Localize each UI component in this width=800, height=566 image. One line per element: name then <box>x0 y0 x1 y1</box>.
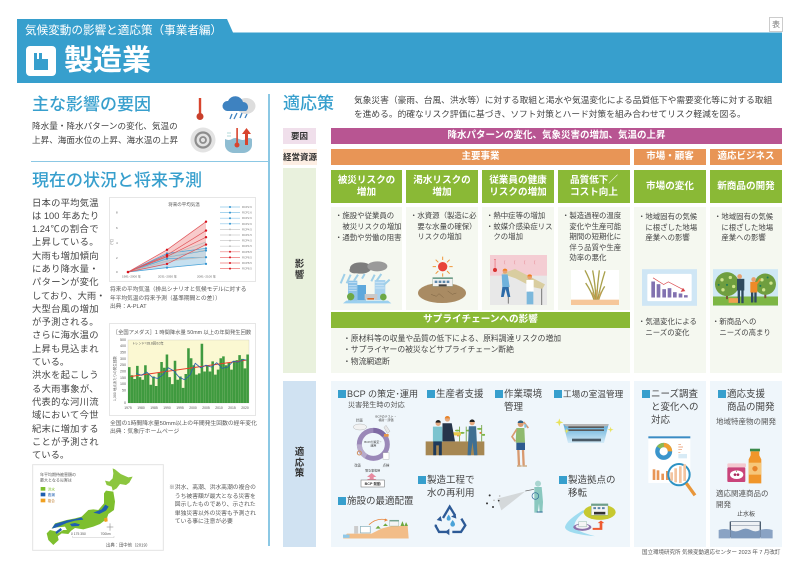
list: ・製造過程の温度 変化や生産可能 期間の短期化に 伴う品質や生産 効率の悪化 <box>562 211 621 262</box>
bar chart: heavy rain frequency: 500 <box>120 338 126 342</box>
illustration: drought factory <box>418 256 466 303</box>
row label: management resources <box>281 149 319 165</box>
subtext: local products: 地域特産物の開発 <box>716 417 776 426</box>
heading: 施設の最適配置 <box>347 496 414 507</box>
text: current status and projection: にあり降水量・ <box>32 264 98 274</box>
text: current status and projection: ことが予測され <box>32 437 98 447</box>
heading: BCP の策定･運用 <box>347 389 418 399</box>
subtext: related products <box>716 489 768 508</box>
line chart: average temperature: 2031–2050 年 <box>158 274 177 278</box>
item: BCP <box>338 389 418 409</box>
bar chart: heavy rain frequency: ［全国アメダス］1 時間降水量 50mm 以上の年間発生回数 <box>113 328 252 336</box>
divider <box>31 161 268 162</box>
list: demand: ・新商品への ニーズの高まり <box>712 317 771 337</box>
heading: 適応支援 商品の開発 <box>727 389 775 413</box>
bar chart: heavy rain frequency: 0 <box>124 401 126 405</box>
bar chart: heavy rain frequency: 150 <box>120 376 126 380</box>
illustration: hot factory workers <box>490 255 547 305</box>
panel: disaster risk <box>331 207 402 310</box>
footer credit: 国立環境研究所 気候変動適応センター 2023 年 7 月改訂 <box>642 550 780 556</box>
item: work environment <box>495 388 542 413</box>
text: current status and projection: 大型台風の増加 <box>32 304 98 314</box>
illustration: jam and juice <box>727 448 762 484</box>
line chart: average temperature: 0 <box>116 270 118 274</box>
text: main factors <box>32 121 178 144</box>
heading: 作業環境 管理 <box>504 389 542 413</box>
illustration: data analysis <box>648 436 696 496</box>
list: ・サプライヤーの被災などサプライチェーン断絶 <box>343 345 514 354</box>
line chart: average temperature: RCP8.5 <box>242 267 252 271</box>
icon: thermometer <box>196 98 204 120</box>
bar chart: heavy rain frequency: 50 <box>122 388 126 392</box>
diagram: BCP cycle <box>353 413 397 488</box>
icon: factory <box>26 46 56 76</box>
bar chart: heavy rain frequency: 1980 <box>137 406 145 410</box>
diagram: BCP cycle: 計画 <box>356 417 363 422</box>
caption: temperature chart: 将来の平均気温（排出シナリオと気候モデルに対する 年平均気温の将来予測（基準期間との差）） 出典：A-PLAT <box>110 287 246 310</box>
impact header: employee health: リスクの増加 <box>489 186 547 198</box>
line chart: average temperature: RCP8.5 <box>242 250 252 254</box>
panel: new products <box>710 207 782 373</box>
bar chart: heavy rain frequency: 2010 <box>215 406 223 410</box>
resource bar: main business: 主要事業 <box>461 151 500 162</box>
diagram: BCP cycle: BCPの策定・ <box>364 439 382 444</box>
text: current status and projection: 紀末に増加する <box>32 424 98 434</box>
text: current status and projection: 1.24℃の割合で <box>32 224 98 234</box>
impact header: disaster risk <box>331 170 402 203</box>
header banner <box>17 19 782 83</box>
bar chart: heavy rain frequency: 400 <box>120 344 126 348</box>
text: current status and projection: しており、大雨・ <box>32 291 105 301</box>
panel: supply chain <box>331 312 630 373</box>
text: current status and projection: は 100 年あたり <box>32 211 99 221</box>
line chart: average temperature: 8 <box>116 210 118 214</box>
bar chart: heavy rain frequency: 350 <box>120 350 126 354</box>
diagram: BCP cycle: 改善 <box>354 462 362 467</box>
impact header: disaster risk: 被災リスクの <box>338 174 395 186</box>
impact header: new products: 新商品の開発 <box>717 180 775 192</box>
bar chart: heavy rain frequency: 2015 <box>228 406 236 410</box>
bar chart: heavy rain frequency: 100 <box>120 382 126 386</box>
diagram: BCP cycle: BCPのテスト・ <box>375 413 397 418</box>
subtext: 災害発生時の対応 <box>348 401 405 409</box>
text: current status and projection: が予測される。 <box>32 317 98 327</box>
item: water reuse <box>418 474 475 499</box>
factor bar <box>331 128 782 144</box>
impact header: quality and cost <box>558 170 630 203</box>
text: current status and projection: ている。 <box>32 357 69 367</box>
list: ・施設や従業員の 被災リスクの増加 ・通勤や労働の阻害 <box>335 211 402 242</box>
marker <box>642 390 650 398</box>
line chart: average temperature: RCP4.5 <box>242 233 252 237</box>
text: current status and projection: さらに海水温の <box>32 330 98 340</box>
illustration: relocation to hill <box>343 518 409 538</box>
diagram: BCP cycle: 検討・評価 <box>378 417 394 422</box>
icon: typhoon <box>190 128 216 152</box>
illustration: air conditioner <box>556 418 614 443</box>
row label: adaptation: 応 <box>295 458 304 469</box>
map: largest disaster type in Japan: 年平均期待被害額の <box>40 471 76 477</box>
line chart: average temperature: RCP2.6 <box>242 211 252 215</box>
map: largest disaster type in Japan: 0 175 350 <box>71 532 86 536</box>
factor bar: 降水パターンの変化、気象災害の増加、気温の上昇 <box>447 130 666 141</box>
bar chart: heavy rain frequency: 2005 <box>202 406 210 410</box>
text: current status and projection: ている。 <box>32 450 69 460</box>
banner background shape <box>17 19 782 83</box>
bar chart: heavy rain frequency: 1995 <box>176 406 184 410</box>
illustration: flooded city <box>340 261 392 304</box>
panel: market adaptation <box>634 381 706 547</box>
row label: adaptation <box>283 381 316 547</box>
impact header: quality and cost: 品質低下／ <box>570 174 618 186</box>
item: factory room temperature <box>554 389 623 399</box>
line chart: average temperature: 4 <box>116 241 118 245</box>
text: current status and projection: 洪水を起こしう <box>32 370 98 380</box>
text: main factors: 上昇、海面水位の上昇、海水温の上昇 <box>32 134 178 144</box>
map: largest disaster type in Japan: 出典：田中他（2019） <box>106 541 150 548</box>
row label: factors: 要因 <box>291 131 308 141</box>
panel: market change <box>634 207 706 373</box>
map: largest disaster type in Japan: 高潮 <box>48 492 55 497</box>
bar chart: heavy rain frequency: 2000 <box>189 406 197 410</box>
text: main factors: 降水量・降水パターンの変化、気温の <box>32 121 178 131</box>
panel: main business adaptation <box>331 381 630 547</box>
line chart: average temperature: 6 <box>116 226 118 230</box>
line chart: average temperature: RCP4.5 <box>242 227 252 231</box>
icon: sea level and temperature rise <box>225 128 252 153</box>
sheet tag: 表 <box>772 20 780 29</box>
bar chart: heavy rain frequency: 300 <box>120 357 126 361</box>
map: largest disaster type in Japan <box>32 464 164 551</box>
heading: ニーズ調査 と変化への 対応 <box>651 389 699 426</box>
text: current status and projection: 域において今世 <box>32 410 98 420</box>
list: ・原材料等の収量や品質の低下による、原料調達リスクの増加 <box>343 334 561 342</box>
resource bar: adaptation business: 適応ビジネス <box>717 151 774 162</box>
item: relocation <box>559 474 616 499</box>
impact header: water shortage <box>406 170 478 203</box>
impact header: water shortage: 渇水リスクの <box>413 174 471 186</box>
bar chart: heavy rain frequency: トレンド=28.8回/10年 <box>132 340 164 346</box>
map: largest disaster type in Japan: 複合 <box>48 498 55 503</box>
line chart: average temperature: 2081–2100 年 <box>197 274 216 278</box>
line chart: average temperature: 将来の平均気温 <box>168 201 200 208</box>
text: current status and projection: パターンが変化 <box>32 277 98 287</box>
resource bar: main business <box>331 149 630 165</box>
text: adaptation intro <box>354 94 772 118</box>
resource bar: market and customers <box>634 149 706 165</box>
text: current status and projection: 日本の平均気温 <box>32 198 98 208</box>
illustration: declining bar chart <box>642 269 697 306</box>
marker <box>427 390 435 398</box>
item: producer support <box>427 388 484 400</box>
text: current status and projection: 上昇も見込まれ <box>32 344 98 354</box>
icon: water recycling <box>434 504 467 536</box>
diagram: BCP cycle: 緊急事態時 <box>365 467 380 472</box>
diagram: BCP cycle: 点検 <box>383 462 390 467</box>
illustration: base relocation <box>565 504 616 536</box>
line chart: average temperature: 1981–2000 年 <box>122 274 141 278</box>
bar chart: heavy rain frequency: 200 <box>120 370 126 374</box>
text: adaptation intro: 気象災害（豪雨、台風、洪水等）に対する取組と渇水や気温変化による品質低下や需要変化等に対する取組 <box>354 94 772 104</box>
list: ・水資源（製造に必 要な水量の確保） リスクの増加 <box>410 211 477 241</box>
heading: 工場の室温管理 <box>563 389 623 399</box>
series title: 気候変動の影響と適応策（事業者編） <box>25 24 222 37</box>
panel: quality decline <box>558 207 630 310</box>
page title: 製造業 <box>64 45 151 77</box>
text: current status and projection: 代表的な河川流 <box>32 397 98 407</box>
bar chart: heavy rain frequency <box>109 323 256 416</box>
bar chart: heavy rain frequency: 1985 <box>150 406 158 410</box>
heading: 製造拠点の 移転 <box>568 475 616 499</box>
panel: water shortage <box>406 207 478 310</box>
bar chart: heavy rain frequency: 250 <box>120 363 126 367</box>
row label: impacts: 響 <box>295 270 304 280</box>
sheet tag <box>769 17 783 32</box>
line chart: average temperature: RCP2.6 <box>242 222 252 226</box>
line chart: average temperature: RCP8.5 <box>242 255 252 259</box>
impact header: employee health <box>482 170 554 203</box>
subtext: related products: 開発 <box>716 500 731 508</box>
map: largest disaster type in Japan: 洪水 <box>48 486 55 491</box>
illustration: worker drinking water <box>511 420 529 467</box>
supply chain header: サプライチェーンへの影響 <box>423 314 538 325</box>
line chart: average temperature: 2 <box>116 256 118 260</box>
line chart: average temperature: RCP2.6 <box>242 216 252 220</box>
illustration: water barrier <box>718 521 773 538</box>
impact header: market change: 市場の変化 <box>646 180 694 192</box>
resource bar: adaptation business <box>710 149 782 165</box>
illustration: producer support <box>426 416 485 456</box>
icon: rain cloud <box>222 96 256 120</box>
list: market impact: ・地域固有の気候 に根ざした地場 産業への影響 <box>638 212 697 242</box>
list: needs change: ・気温変化による ニーズの変化 <box>638 317 697 337</box>
text: current status and projection <box>32 198 105 460</box>
left column divider <box>268 94 270 546</box>
bar chart: heavy rain frequency: 1,300 地点あたりの発生回数 <box>112 356 117 401</box>
map: largest disaster type in Japan: 700km <box>101 532 111 536</box>
list: ・熱中症等の増加 ・蚊媒介感染症リス クの増加 <box>486 211 553 241</box>
line chart: average temperature: RCP2.6 <box>242 205 252 209</box>
text: adaptation intro: を進める。的確なリスク評価に基づき、ソフト対策とハード対策を組み合わせてリスク軽減を図る。 <box>354 108 746 118</box>
row label: factors <box>283 128 316 144</box>
panel: business adaptation <box>710 381 782 547</box>
impact header: quality and cost: コスト向上 <box>570 186 618 198</box>
supply chain header <box>331 312 630 328</box>
text: current status and projection: 上昇している。 <box>32 237 98 247</box>
bar chart: heavy rain frequency: 1990 <box>163 406 171 410</box>
row label: impacts: 影 <box>295 259 304 270</box>
text: current status and projection: る大雨事象が、 <box>32 384 98 394</box>
row label: impacts <box>283 168 316 373</box>
row label: adaptation: 適 <box>295 447 304 458</box>
text: current status and projection: 大雨も増加傾向 <box>32 251 98 261</box>
illustration: orchard harvest <box>713 269 778 306</box>
impact header: water shortage: 増加 <box>432 186 452 198</box>
list <box>343 334 561 366</box>
row label: adaptation: 策 <box>295 468 304 479</box>
line chart: average temperature <box>109 197 256 282</box>
label: water barrier: 止水板 <box>737 512 755 518</box>
bar chart: heavy rain frequency: 2020 <box>241 406 249 410</box>
marker <box>718 390 726 398</box>
list: ・物流網遮断 <box>343 356 390 366</box>
impact header: new products <box>710 170 782 203</box>
heading: adaptation: 適応策 <box>283 94 334 113</box>
caption: heavy rain chart: 全国の1時間降水量50mm以上の年間発生回数の経年変化 出典：気象庁ホームページ <box>110 421 257 435</box>
subtext: related products: 適応関連商品の <box>716 489 768 498</box>
illustration: disinfection spray <box>486 480 543 513</box>
line chart: average temperature: RCP4.5 <box>242 239 252 243</box>
heading: 製造工程で 水の再利用 <box>427 475 475 499</box>
diagram: BCP cycle: 運用 <box>370 443 376 448</box>
impact header: employee health: 従業員の健康 <box>489 174 547 186</box>
marker <box>495 390 503 398</box>
map: largest disaster type in Japan: 最大となる災害は <box>40 477 72 483</box>
resource bar: market and customers: 市場・顧客 <box>646 151 694 162</box>
list: local industry: ・地域固有の気候 に根ざした地場 産業への影響 <box>714 212 773 242</box>
heading: current and future: 現在の状況と将来予測 <box>32 171 202 190</box>
line chart: average temperature: RCP8.5 <box>242 261 252 265</box>
impact header: market change <box>634 170 706 203</box>
line chart: average temperature: RCP4.5 <box>242 244 252 248</box>
heading: 生産者支援 <box>436 389 484 400</box>
marker <box>418 476 426 484</box>
bar chart: heavy rain frequency: 1975 <box>124 406 132 410</box>
diagram: BCP cycle: BCP 発動 <box>365 481 381 486</box>
impact header: disaster risk: 増加 <box>357 186 376 198</box>
marker <box>338 497 346 505</box>
marker <box>559 476 567 484</box>
marker <box>338 390 346 398</box>
note under map: ※洪水、高潮、洪水高潮の複合の うち被害額が最大となる災害を 図示したものであり、示された 単独災害以外の災害も予測され ている事に注意が必要 <box>169 485 256 525</box>
heading: main factors: 主な影響の要因 <box>32 95 151 114</box>
panel: employee health <box>482 207 554 310</box>
row label: management resources: 経営資源 <box>283 152 317 162</box>
illustration: damaged crop <box>571 270 619 305</box>
marker <box>554 390 562 398</box>
item: optimal placement <box>338 496 414 507</box>
line chart: average temperature: （℃） <box>109 236 114 247</box>
